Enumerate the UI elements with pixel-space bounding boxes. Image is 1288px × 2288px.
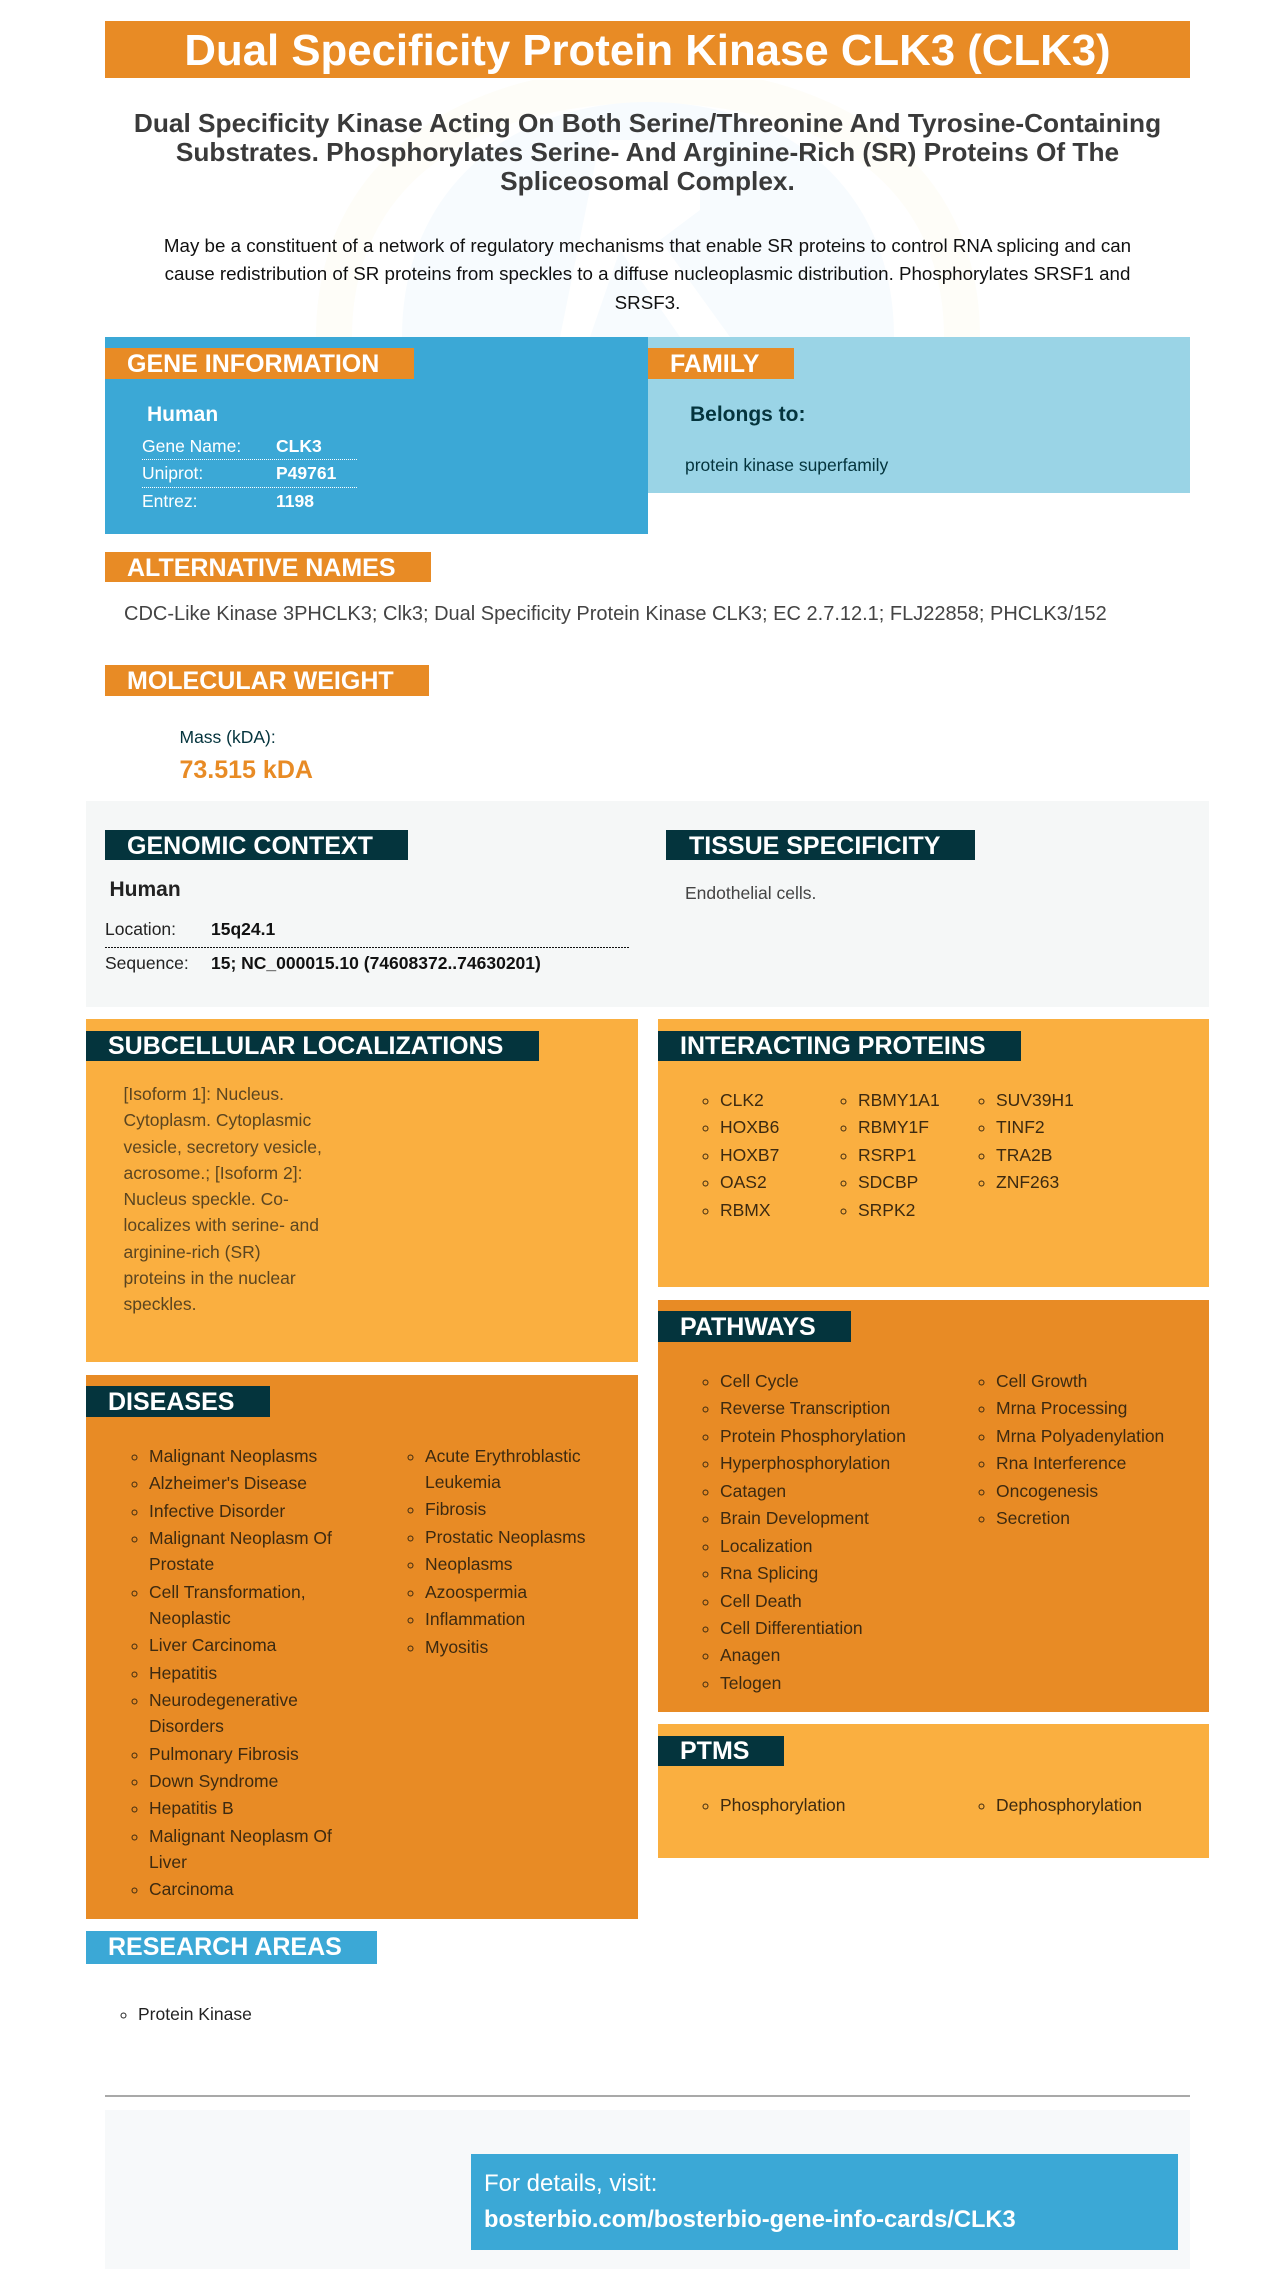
disease list column 1: Infective Disorder — [149, 1501, 285, 1521]
pathway list column 1: Cell Death — [720, 1590, 802, 1610]
disease list column 2: Inflammation — [425, 1609, 525, 1629]
entrez row: Entrez: — [142, 491, 197, 511]
pathway list column 2: Mrna Processing — [996, 1398, 1127, 1418]
disease list column 2: Acute Erythroblastic Leukemia — [425, 1446, 581, 1492]
heading: genomic context: GENOMIC CONTEXT — [127, 832, 373, 860]
heading: gene information: GENE INFORMATION — [127, 350, 379, 378]
location row — [105, 919, 275, 939]
heading: PTMs — [658, 1736, 784, 1766]
heading: interacting proteins: INTERACTING PROTEINS — [680, 1032, 986, 1060]
mass label: Mass (kDA): — [180, 727, 276, 747]
pathway list column 1: Anagen — [720, 1645, 780, 1665]
protein list column 1: HOXB7 — [720, 1145, 779, 1165]
tissue specificity text: Endothelial cells. — [685, 883, 816, 903]
pathway list column 1: Reverse Transcription — [720, 1398, 890, 1418]
protein list column 2: SRPK2 — [858, 1200, 915, 1220]
protein list column 3: TINF2 — [996, 1117, 1045, 1137]
localization text: localizes with serine- and — [124, 1215, 319, 1235]
uniprot row: P49761 — [276, 463, 336, 483]
description paragraph: SRSF3. — [615, 292, 680, 312]
panel: genomic context and tissue specificity — [86, 801, 1209, 1007]
pathway list column 1: Cell Cycle — [720, 1371, 799, 1391]
disease list column 1: Hepatitis B — [149, 1798, 234, 1818]
disease list column 1: Liver Carcinoma — [149, 1635, 276, 1655]
mass value: 73.515 kDA — [180, 756, 313, 784]
pathway list column 2: Cell Growth — [996, 1371, 1087, 1391]
panel: subcellular localizations — [86, 1019, 638, 1362]
pathway list column 1: Cell Differentiation — [720, 1618, 863, 1638]
disease list column 1: Malignant Neoplasm Of Prostate — [149, 1528, 332, 1574]
heading: molecular weight: MOLECULAR WEIGHT — [127, 667, 394, 695]
protein list column 1 — [702, 1090, 779, 1220]
sequence row — [105, 953, 541, 973]
disease list column 1: Hepatitis — [149, 1663, 217, 1683]
localization text: vesicle, secretory vesicle, — [124, 1137, 322, 1157]
entrez row — [142, 491, 314, 511]
protein list column 2: SDCBP — [858, 1172, 918, 1192]
protein list column 3: SUV39H1 — [996, 1090, 1074, 1110]
pathway list column 1: Brain Development — [720, 1508, 869, 1528]
panel: genomic context and tissue specificity: 15q24.1 — [211, 919, 275, 939]
protein list column 1: RBMX — [720, 1200, 771, 1220]
subtitle: Dual Specificity Kinase Acting On Both Serine/Threonine And Tyrosine-Containing — [134, 108, 1161, 138]
panel: diseases — [86, 1375, 638, 1919]
pathway list column 1: Localization — [720, 1536, 812, 1556]
heading: research areas — [86, 1931, 377, 1964]
disease list column 1: Alzheimer's Disease — [149, 1473, 307, 1493]
disease list column 1: Cell Transformation, Neoplastic — [149, 1582, 306, 1628]
pathway list column 1: Hyperphosphorylation — [720, 1453, 890, 1473]
disease list column 1: Neurodegenerative Disorders — [149, 1690, 298, 1736]
localization text: arginine-rich (SR) — [124, 1242, 261, 1262]
protein list column 2: RSRP1 — [858, 1145, 916, 1165]
title banner: Dual Specificity Protein Kinase CLK3 (CLK3) — [184, 26, 1111, 75]
disease list column 2: Azoospermia — [425, 1582, 527, 1602]
panel: genomic context and tissue specificity: 15; NC_000015.10 (74608372..74630201) — [211, 953, 541, 973]
pathway list column 2: Mrna Polyadenylation — [996, 1426, 1164, 1446]
gene name row: Gene Name: — [142, 436, 241, 456]
species label: Human — [110, 878, 181, 901]
protein list column 3: ZNF263 — [996, 1172, 1059, 1192]
description paragraph: cause redistribution of SR proteins from speckles to a diffuse nucleoplasmic distribution. Phosphorylates SRSF1 and — [165, 263, 1130, 284]
heading: family — [648, 348, 794, 379]
alternative names text: CDC-Like Kinase 3PHCLK3; Clk3; Dual Specificity Protein Kinase CLK3; EC 2.7.12.1; FLJ22858; PHCLK3/152 — [124, 602, 1107, 624]
protein list column 2: RBMY1A1 — [858, 1090, 940, 1110]
description paragraph: May be a constituent of a network of regulatory mechanisms that enable SR proteins to control RNA splicing and can — [164, 234, 1131, 256]
callout: details link: For details, visit: — [484, 2170, 657, 2197]
protein list column 3: TRA2B — [996, 1145, 1052, 1165]
localization text: [Isoform 1]: Nucleus. — [124, 1084, 284, 1104]
heading: PTMs: PTMS — [680, 1737, 749, 1765]
pathway list column 2 — [978, 1371, 1164, 1528]
pathway list column 1: Rna Splicing — [720, 1563, 818, 1583]
pathway list column 1: Telogen — [720, 1673, 781, 1693]
protein list column 2: RBMY1F — [858, 1117, 929, 1137]
panel: PTMs — [658, 1724, 1209, 1858]
pathway list column 1: Catagen — [720, 1481, 786, 1501]
localization text — [124, 1084, 322, 1314]
localization text: proteins in the nuclear — [124, 1268, 296, 1288]
callout: details link — [471, 2154, 1178, 2250]
panel: footer — [105, 2110, 1190, 2269]
uniprot row — [142, 463, 336, 483]
family value: protein kinase superfamily — [685, 455, 888, 475]
callout: details link: bosterbio.com/bosterbio-gene-info-cards/CLK3 — [484, 2207, 1016, 2233]
localization text: Nucleus speckle. Co- — [124, 1189, 289, 1209]
pathway list column 1: Protein Phosphorylation — [720, 1426, 906, 1446]
panel: interacting proteins — [658, 1019, 1209, 1287]
disease list column 1: Malignant Neoplasms — [149, 1446, 317, 1466]
uniprot row: Uniprot: — [142, 463, 203, 483]
disease list column 1: Malignant Neoplasm Of Liver — [149, 1826, 332, 1872]
heading: diseases — [86, 1386, 270, 1417]
localization text: Cytoplasm. Cytoplasmic — [124, 1110, 311, 1130]
heading: pathways: PATHWAYS — [680, 1313, 816, 1341]
protein list column 1: OAS2 — [720, 1172, 767, 1192]
heading: subcellular localizations: SUBCELLULAR LOCALIZATIONS — [108, 1032, 503, 1060]
heading: diseases: DISEASES — [108, 1388, 234, 1416]
protein list column 1: HOXB6 — [720, 1117, 779, 1137]
disease list column 1 — [132, 1446, 332, 1899]
protein list column 3 — [978, 1090, 1074, 1192]
disease list column 2: Prostatic Neoplasms — [425, 1527, 585, 1547]
research areas list: Protein Kinase — [138, 2004, 252, 2024]
gene name row — [142, 436, 322, 456]
pathway list column 2: Oncogenesis — [996, 1481, 1098, 1501]
heading: research areas: RESEARCH AREAS — [108, 1933, 342, 1961]
gene name row: CLK3 — [276, 436, 322, 456]
belongs to label: Belongs to: — [690, 403, 806, 426]
heading: alternative names: ALTERNATIVE NAMES — [127, 554, 396, 582]
heading: pathways — [658, 1311, 851, 1342]
panel: family — [648, 337, 1190, 493]
disease list column 2: Fibrosis — [425, 1499, 486, 1519]
localization text: speckles. — [124, 1294, 196, 1314]
description paragraph — [164, 234, 1131, 312]
pathway list column 2: Rna Interference — [996, 1453, 1126, 1473]
heading: family: FAMILY — [670, 350, 759, 378]
protein list column 1: CLK2 — [720, 1090, 764, 1110]
subtitle: Substrates. Phosphorylates Serine- And Arginine-Rich (SR) Proteins Of The — [176, 137, 1119, 167]
disease list column 2: Myositis — [425, 1637, 488, 1657]
location row: Location: — [105, 919, 176, 939]
disease list column 1: Down Syndrome — [149, 1771, 278, 1791]
heading: tissue specificity: TISSUE SPECIFICITY — [689, 832, 940, 860]
disease list column 1: Pulmonary Fibrosis — [149, 1744, 299, 1764]
pathway list column 2: Secretion — [996, 1508, 1070, 1528]
disease list column 2 — [408, 1446, 585, 1657]
protein list column 2 — [840, 1090, 940, 1220]
background watermark logo — [300, 80, 1000, 340]
panel: gene information — [105, 337, 648, 534]
disease list column 2: Neoplasms — [425, 1554, 513, 1574]
subtitle: Spliceosomal Complex. — [500, 166, 795, 196]
entrez row: 1198 — [276, 491, 314, 511]
panel: pathways — [658, 1300, 1209, 1712]
disease list column 1: Carcinoma — [149, 1879, 234, 1899]
PTM list column 2: Dephosphorylation — [996, 1795, 1142, 1815]
pathway list column 1 — [702, 1371, 906, 1693]
localization text: acrosome.; [Isoform 2]: — [124, 1163, 302, 1183]
species label: Human — [147, 403, 218, 426]
subtitle — [134, 108, 1161, 196]
PTM list column 1: Phosphorylation — [720, 1795, 846, 1815]
sequence row: Sequence: — [105, 953, 189, 973]
